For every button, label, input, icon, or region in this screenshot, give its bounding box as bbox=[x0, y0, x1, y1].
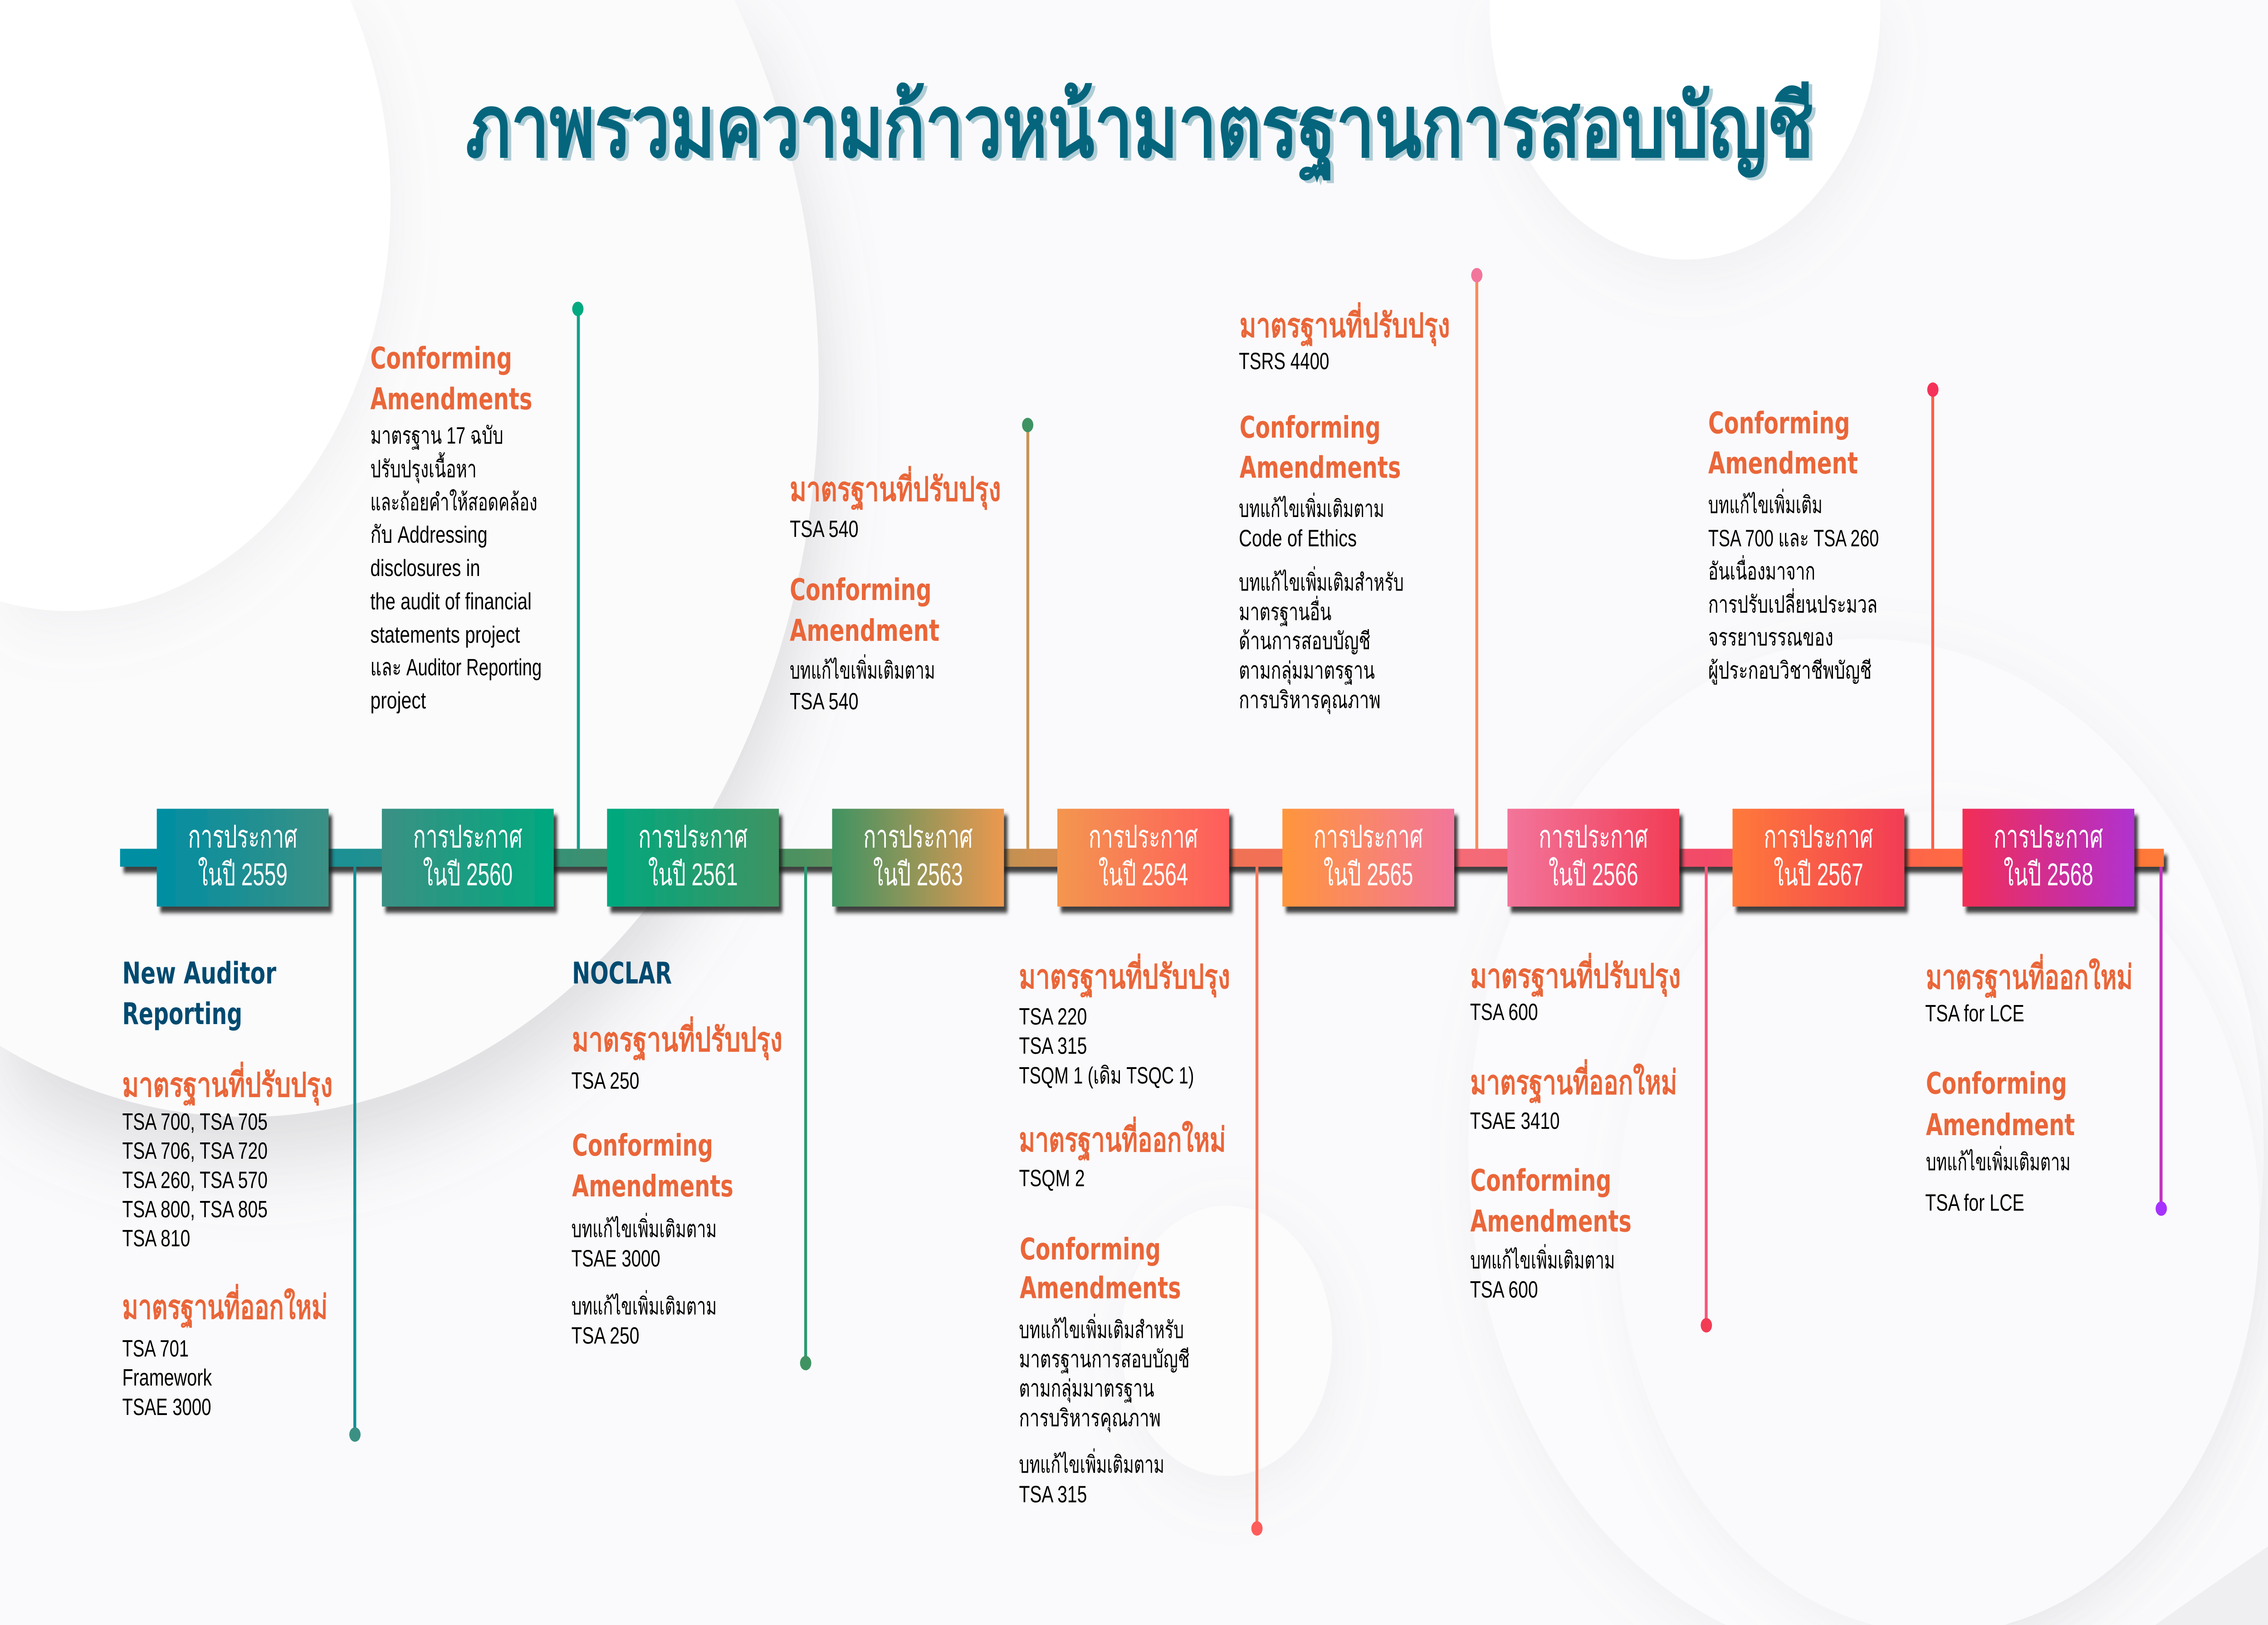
body text bbox=[1470, 1244, 1615, 1303]
heading: Conforming Amendments: Conforming bbox=[572, 1128, 713, 1163]
connector 2560 bbox=[572, 302, 583, 849]
body text: มาตรฐานอื่น bbox=[1239, 596, 1331, 626]
year box 2564: การประกาศ bbox=[1089, 820, 1198, 854]
list: new standards: TSQM 2 bbox=[1019, 1165, 1085, 1191]
body text: บทแก้ไขเพิ่มเติม bbox=[1708, 489, 1823, 518]
body text bbox=[1925, 1146, 2071, 1216]
heading: Conforming Amendment: Amendment bbox=[1926, 1108, 2075, 1142]
list: revised standards: TSA 706, TSA 720 bbox=[122, 1137, 268, 1164]
body text: มาตรฐานการสอบบัญชี bbox=[1019, 1346, 1190, 1373]
connector 2568 bbox=[2156, 867, 2167, 1216]
year box 2563: ในปี 2563 bbox=[873, 857, 963, 893]
year box 2561: การประกาศ bbox=[638, 820, 748, 854]
body text: TSAE 3000 bbox=[572, 1245, 660, 1271]
connector 2563 bbox=[1022, 418, 1033, 849]
year box 2561 bbox=[607, 809, 779, 907]
heading: new standards: มาตรฐานที่ออกใหม่ bbox=[1470, 1059, 1677, 1104]
heading: Conforming Amendments bbox=[572, 1128, 733, 1204]
year box 2559: การประกาศ bbox=[188, 820, 298, 854]
heading: Conforming Amendments bbox=[1240, 410, 1401, 485]
year box 2566: ในปี 2566 bbox=[1549, 857, 1638, 893]
body text bbox=[1239, 493, 1404, 715]
timeline bar bbox=[120, 849, 2164, 867]
body text: บทแก้ไขเพิ่มเติมตาม bbox=[1926, 1146, 2071, 1175]
body text: บทแก้ไขเพิ่มเติมตาม bbox=[1470, 1244, 1615, 1274]
heading: new standards: มาตรฐานที่ออกใหม่ bbox=[122, 1283, 327, 1329]
heading: Conforming Amendments: Amendments bbox=[572, 1169, 733, 1204]
panel: 2559 bbox=[122, 956, 332, 1420]
list: revised standards: TSQM 1 (เดิม TSQC 1) bbox=[1019, 1062, 1194, 1088]
heading: Conforming Amendments: Conforming bbox=[1240, 410, 1381, 445]
heading: Conforming Amendments bbox=[370, 341, 532, 416]
body text: การปรับเปลี่ยนประมวล bbox=[1708, 588, 1877, 618]
heading: Conforming Amendments bbox=[1020, 1231, 1181, 1305]
year box 2565: ในปี 2565 bbox=[1324, 857, 1413, 893]
body text: จรรยาบรรณของ bbox=[1708, 624, 1833, 650]
heading: revised standards: มาตรฐานที่ปรับปรุง bbox=[1019, 953, 1230, 998]
year box 2563 bbox=[832, 809, 1004, 907]
panel: 2567 bbox=[1708, 405, 1879, 685]
heading: Conforming Amendments bbox=[1470, 1163, 1632, 1239]
list: new standards: TSA for LCE bbox=[1925, 1000, 2024, 1026]
heading: Conforming Amendment: Conforming bbox=[790, 572, 932, 607]
heading: new standards: มาตรฐานที่ออกใหม่ bbox=[1019, 1116, 1226, 1161]
body text bbox=[1708, 489, 1879, 685]
body text: ปรับปรุงเนื้อหา bbox=[370, 452, 477, 483]
body text: ด้านการสอบบัญชี bbox=[1239, 628, 1370, 654]
list: revised standards: TSA 260, TSA 570 bbox=[122, 1167, 268, 1193]
body text bbox=[790, 654, 935, 714]
body text: และถ้อยคำให้สอดคล้อง bbox=[370, 489, 538, 515]
list: new standards: TSAE 3000 bbox=[122, 1394, 211, 1420]
body text bbox=[572, 1213, 717, 1349]
heading: NOCLAR: NOCLAR bbox=[572, 956, 672, 991]
body text: บทแก้ไขเพิ่มเติมตาม bbox=[1019, 1449, 1164, 1478]
body text: การบริหารคุณภาพ bbox=[1239, 687, 1381, 715]
heading: Conforming Amendment: Amendment bbox=[1708, 446, 1858, 481]
heading: new standards: มาตรฐานที่ออกใหม่ bbox=[1926, 953, 2133, 999]
year box 2568: การประกาศ bbox=[1994, 820, 2103, 854]
year box 2561: ในปี 2561 bbox=[648, 857, 738, 893]
body text: บทแก้ไขเพิ่มเติมตาม bbox=[572, 1290, 717, 1319]
heading: revised standards: มาตรฐานที่ปรับปรุง bbox=[572, 1015, 782, 1061]
body text: statements project bbox=[370, 621, 520, 648]
list: revised standards: TSA 800, TSA 805 bbox=[122, 1196, 268, 1222]
heading: Conforming Amendment bbox=[790, 572, 939, 648]
body text: บทแก้ไขเพิ่มเติมตาม bbox=[790, 654, 935, 683]
list: revised standards: TSA 315 bbox=[1019, 1033, 1087, 1059]
list: revised standards: TSA 700, TSA 705 bbox=[122, 1108, 268, 1135]
heading: Conforming Amendment: Conforming bbox=[1926, 1066, 2067, 1101]
heading: New Auditor Reporting: New Auditor bbox=[122, 956, 277, 991]
body text: บทแก้ไขเพิ่มเติมตาม bbox=[572, 1213, 717, 1242]
panel: 2566 bbox=[1470, 952, 1681, 1303]
panel: 2563 bbox=[790, 465, 1001, 714]
body text: มาตรฐาน 17 ฉบับ bbox=[370, 422, 503, 449]
body text: และ Auditor Reporting bbox=[370, 654, 542, 680]
connector 2565 bbox=[1471, 268, 1482, 849]
body text: ผู้ประกอบวิชาชีพบัญชี bbox=[1708, 657, 1872, 685]
year box 2565 bbox=[1282, 809, 1454, 907]
body text: TSA 700 และ TSA 260 bbox=[1708, 525, 1879, 551]
year box 2567 bbox=[1733, 809, 1904, 907]
heading: New Auditor Reporting bbox=[122, 956, 277, 1031]
body text: การบริหารคุณภาพ bbox=[1019, 1405, 1161, 1433]
year box 2560 bbox=[382, 809, 554, 907]
panel: 2568 bbox=[1925, 953, 2133, 1216]
year box 2560: การประกาศ bbox=[413, 820, 523, 854]
body text: TSA 315 bbox=[1019, 1481, 1087, 1508]
list: new standards: TSA 701 bbox=[122, 1335, 189, 1361]
connector 2564 bbox=[1251, 867, 1262, 1536]
year box 2566: การประกาศ bbox=[1539, 820, 1648, 854]
list: revised standards: TSA 250 bbox=[572, 1067, 639, 1093]
heading: Conforming Amendment: Amendment bbox=[790, 613, 939, 648]
year box 2567: การประกาศ bbox=[1764, 820, 1873, 854]
list: revised standards: TSA 540 bbox=[790, 516, 859, 542]
body text: ตามกลุ่มมาตรฐาน bbox=[1019, 1375, 1154, 1403]
heading: Conforming Amendments: Amendments bbox=[1240, 450, 1401, 485]
body text: TSA 540 bbox=[790, 688, 859, 714]
list: revised standards bbox=[122, 1108, 268, 1251]
heading: Conforming Amendments: Conforming bbox=[370, 341, 512, 376]
title: ภาพรวมความก้าวหน้ามาตรฐานการสอบบัญชี bbox=[469, 81, 1818, 186]
title: ภาพรวมความก้าวหน้ามาตรฐานการสอบบัญชี bbox=[466, 78, 1814, 183]
year box 2564: ในปี 2564 bbox=[1099, 857, 1188, 893]
year box 2560: ในปี 2560 bbox=[423, 857, 513, 893]
body text: TSA 250 bbox=[572, 1322, 639, 1349]
list: revised standards: TSA 220 bbox=[1019, 1003, 1087, 1030]
connector 2561 bbox=[800, 867, 811, 1370]
year box 2566 bbox=[1507, 809, 1679, 907]
connector 2566 bbox=[1701, 867, 1712, 1332]
list: new standards: Framework bbox=[122, 1364, 212, 1391]
heading: Conforming Amendments: Conforming bbox=[1470, 1163, 1611, 1198]
year box 2559 bbox=[157, 809, 328, 907]
body text: อันเนื่องมาจาก bbox=[1708, 555, 1815, 584]
list: revised standards: TSA 810 bbox=[122, 1225, 190, 1251]
heading: Conforming Amendment bbox=[1926, 1066, 2075, 1142]
connector 2559 bbox=[349, 867, 361, 1442]
heading: Conforming Amendments: Amendments bbox=[1470, 1204, 1632, 1239]
heading: Conforming Amendment bbox=[1708, 405, 1858, 481]
body text: TSA for LCE bbox=[1925, 1190, 2024, 1216]
heading: revised standards: มาตรฐานที่ปรับปรุง bbox=[122, 1061, 332, 1107]
list: revised standards: TSA 600 bbox=[1470, 999, 1538, 1025]
heading: New Auditor Reporting: Reporting bbox=[122, 996, 242, 1031]
body text: the audit of financial bbox=[370, 588, 532, 615]
body text: บทแก้ไขเพิ่มเติมสำหรับ bbox=[1239, 566, 1404, 595]
heading: revised standards: มาตรฐานที่ปรับปรุง bbox=[1470, 952, 1681, 998]
panel: 2565 bbox=[1239, 302, 1450, 715]
year box 2565: การประกาศ bbox=[1314, 820, 1423, 854]
body text: TSA 600 bbox=[1470, 1276, 1538, 1303]
heading: Conforming Amendments: Conforming bbox=[1020, 1231, 1161, 1266]
body text: project bbox=[370, 687, 426, 713]
body text: Code of Ethics bbox=[1239, 525, 1357, 551]
body text: disclosures in bbox=[370, 555, 480, 581]
list: revised standards bbox=[1019, 1003, 1194, 1088]
body text bbox=[370, 422, 542, 713]
year box 2568: ในปี 2568 bbox=[2004, 857, 2093, 893]
heading: Conforming Amendments: Amendments bbox=[370, 381, 532, 416]
body text bbox=[1019, 1313, 1190, 1508]
list: new standards: TSAE 3410 bbox=[1470, 1108, 1559, 1134]
year box 2564 bbox=[1057, 809, 1229, 907]
heading: Conforming Amendment: Conforming bbox=[1708, 405, 1850, 440]
list: new standards bbox=[122, 1335, 212, 1420]
heading: revised standards: มาตรฐานที่ปรับปรุง bbox=[1240, 302, 1450, 347]
connector 2567 bbox=[1927, 382, 1939, 849]
year box 2563: การประกาศ bbox=[863, 820, 973, 854]
panel: 2564 bbox=[1019, 953, 1230, 1508]
body text: บทแก้ไขเพิ่มเติมตาม bbox=[1239, 493, 1384, 522]
year box 2559: ในปี 2559 bbox=[198, 857, 288, 893]
panel: 2561 bbox=[572, 956, 782, 1349]
heading: revised standards: มาตรฐานที่ปรับปรุง bbox=[790, 465, 1001, 511]
panel: 2560 bbox=[370, 341, 542, 713]
year box 2567: ในปี 2567 bbox=[1774, 857, 1863, 893]
heading: Conforming Amendments: Amendments bbox=[1020, 1270, 1181, 1305]
year box 2568 bbox=[1963, 809, 2134, 907]
body text: บทแก้ไขเพิ่มเติมสำหรับ bbox=[1019, 1313, 1184, 1343]
body text: ตามกลุ่มมาตรฐาน bbox=[1239, 657, 1375, 685]
body text: กับ Addressing bbox=[370, 522, 488, 548]
list: revised standards: TSRS 4400 bbox=[1239, 348, 1329, 374]
